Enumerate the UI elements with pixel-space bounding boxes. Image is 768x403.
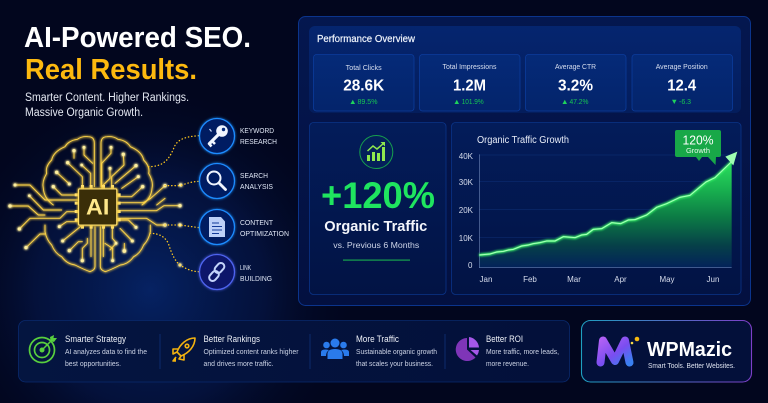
label: keyword research: KEYWORD (240, 128, 274, 135)
icon: AI chip (75, 185, 121, 229)
icon: AI chip: AI (86, 195, 109, 220)
label: comparison period: vs. Previous 6 Months (333, 240, 419, 250)
label: content optimization (240, 220, 289, 238)
metric: total clicks: 28.6K (343, 78, 385, 95)
icon: target (30, 335, 57, 362)
text: better roi: Better ROI (486, 334, 523, 344)
metric: total impressions: Total Impressions (442, 64, 497, 71)
x axis labels: Jan (480, 275, 492, 284)
panel: WPMazic logo (582, 320, 752, 382)
panel: dashboard (298, 16, 750, 306)
label: link building (240, 265, 272, 283)
y axis labels: 10K (459, 234, 474, 243)
benefit: more traffic (321, 334, 437, 368)
text: smarter strategy: Smarter Strategy (65, 334, 126, 344)
title (24, 22, 251, 86)
icon: pie chart (456, 337, 479, 361)
panel: organic traffic stat (310, 122, 446, 294)
metric: average ctr (526, 54, 626, 111)
label: link building: BUILDING (240, 276, 272, 283)
label: content optimization: CONTENT (240, 220, 274, 227)
label: keyword research (240, 128, 277, 146)
metric: total clicks: Total Clicks (346, 65, 382, 72)
y axis labels: 40K (459, 152, 474, 161)
text: smarter strategy (65, 334, 147, 368)
heading: performance overview: Performance Overview (317, 34, 416, 45)
big number: +120% (321, 175, 435, 216)
callout: 120% growth: Growth (686, 146, 710, 155)
metric: average position: 12.4 (667, 78, 696, 95)
icon: WPMazic M mark (600, 337, 639, 362)
metric: average position: Average Position (656, 64, 708, 71)
line chart (479, 152, 737, 268)
benefit: smarter strategy (30, 334, 147, 368)
metric: total clicks: 89.5% (358, 99, 378, 106)
text: better rankings: and drives more traffic. (204, 361, 274, 368)
icon: key (200, 118, 234, 154)
metric: total impressions (420, 54, 520, 111)
metric: average ctr: 47.2% (570, 99, 588, 106)
y axis labels: 0 (468, 261, 473, 270)
panel: organic traffic growth chart (452, 122, 741, 294)
icon: magnifier (200, 164, 234, 198)
icon: people (321, 338, 349, 359)
panel: performance overview (309, 26, 741, 113)
x axis labels: May (659, 275, 675, 284)
text: more traffic (356, 334, 437, 368)
text: better rankings: Better Rankings (204, 334, 260, 344)
title: Real Results. (25, 54, 197, 86)
icon: document (200, 210, 234, 244)
text: better rankings (204, 334, 299, 368)
icon: growth chart (360, 136, 393, 168)
label: content optimization: OPTIMIZATION (240, 231, 289, 238)
subtitle: Smarter Content. Higher Rankings. (25, 92, 189, 104)
label: search analysis (240, 173, 273, 191)
metric: average position (632, 54, 732, 111)
feature: link building (200, 254, 272, 290)
benefit: better roi (456, 334, 559, 368)
label: organic traffic: Organic Traffic (324, 219, 427, 235)
metric: average ctr: 3.2% (558, 78, 593, 95)
feature: content optimization (200, 210, 289, 244)
y axis labels (459, 152, 474, 270)
subtitle: Massive Organic Growth. (25, 107, 143, 119)
text: better roi: More traffic, more leads, (486, 349, 559, 356)
callout: 120% growth: 120% (682, 134, 714, 148)
text: WPMazic wordmark: WPMazic (647, 339, 732, 361)
callout: 120% growth (675, 130, 721, 165)
subtitle (25, 92, 189, 119)
x axis labels: Apr (614, 275, 627, 284)
heading: organic traffic growth: Organic Traffic Growth (477, 135, 569, 146)
metric: average position: -6.3 (679, 99, 691, 106)
text: smarter strategy: AI analyzes data to find the (65, 349, 147, 356)
metric: total clicks (314, 54, 414, 111)
label: search analysis: ANALYSIS (240, 184, 273, 191)
benefit: better rankings (173, 334, 299, 368)
text: more traffic: that scales your business. (356, 361, 433, 368)
icon: rocket (173, 338, 195, 361)
text: better roi: more revenue. (486, 361, 529, 368)
y axis labels: 30K (459, 178, 474, 187)
metric: average ctr: Average CTR (555, 64, 596, 71)
text: tagline: Smart Tools. Better Websites. (648, 361, 735, 370)
label: keyword research: RESEARCH (240, 139, 277, 146)
connector lines (148, 136, 199, 272)
feature: keyword research (200, 118, 277, 154)
icon: AI brain circuit (8, 137, 182, 272)
text: better roi (486, 334, 559, 368)
text: better rankings: Optimized content ranks higher (204, 349, 299, 356)
title: AI-Powered SEO. (24, 22, 251, 54)
y axis labels: 20K (459, 206, 474, 215)
metric: total impressions: 1.2M (453, 78, 486, 95)
x axis labels: Feb (523, 275, 537, 284)
feature: search analysis (200, 164, 273, 198)
text: more traffic: Sustainable organic growth (356, 349, 437, 356)
x axis labels (480, 275, 719, 284)
x axis labels: Jun (707, 275, 719, 284)
icon: chain link (200, 254, 234, 290)
panel: benefits strip (18, 320, 570, 382)
label: link building: LINK (240, 265, 251, 272)
text: more traffic: More Traffic (356, 334, 399, 344)
metric: total impressions: 101.9% (462, 99, 484, 106)
x axis labels: Mar (567, 275, 581, 284)
label: search analysis: SEARCH (240, 173, 268, 180)
text: smarter strategy: best opportunities. (65, 361, 121, 368)
